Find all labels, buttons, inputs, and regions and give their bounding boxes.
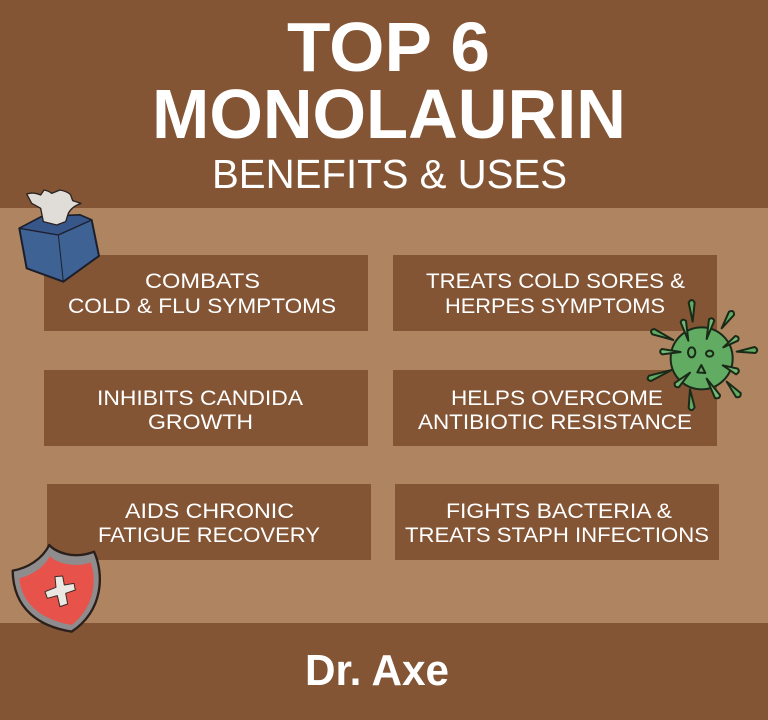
title xyxy=(152,8,626,153)
title: MONOLAURIN xyxy=(152,75,626,153)
panel: fights bacteria and staph xyxy=(395,484,719,560)
panel: combats cold and flu xyxy=(44,255,368,331)
panel: helps overcome antibiotic resistance xyxy=(393,370,717,446)
panel: aids chronic fatigue recovery xyxy=(47,484,371,560)
panel: inhibits candida growth xyxy=(44,370,368,446)
header band xyxy=(0,0,768,208)
cross xyxy=(45,576,75,607)
panel: inhibits candida growth: GROWTH xyxy=(148,410,253,434)
panel: helps overcome antibiotic resistance: HELPS OVERCOME xyxy=(451,386,663,410)
icon: tissue box xyxy=(19,190,99,282)
panel: helps overcome antibiotic resistance: ANTIBIOTIC RESISTANCE xyxy=(418,410,692,434)
panel: inhibits candida growth: INHIBITS CANDIDA xyxy=(97,386,304,410)
panel: aids chronic fatigue recovery: AIDS CHRONIC xyxy=(125,499,294,523)
icon: shield with cross xyxy=(13,545,100,632)
footer band xyxy=(0,623,768,720)
panel: treats cold sores and herpes xyxy=(393,255,717,331)
icon: green virus xyxy=(648,300,757,410)
title: TOP 6 xyxy=(287,8,490,86)
subtitle: BENEFITS & USES xyxy=(212,151,567,197)
panel: aids chronic fatigue recovery: FATIGUE RECOVERY xyxy=(98,523,320,547)
panel: treats cold sores and herpes: TREATS COLD SORES & xyxy=(426,269,685,293)
logo text: Dr. Axe xyxy=(305,646,449,695)
panel: fights bacteria and staph: TREATS STAPH INFECTIONS xyxy=(405,523,709,547)
panel: combats cold and flu: COMBATS xyxy=(145,269,260,293)
panel: combats cold and flu: COLD & FLU SYMPTOMS xyxy=(68,294,336,318)
panel: fights bacteria and staph: FIGHTS BACTERIA & xyxy=(446,499,672,523)
panel: treats cold sores and herpes: HERPES SYMPTOMS xyxy=(445,294,665,318)
